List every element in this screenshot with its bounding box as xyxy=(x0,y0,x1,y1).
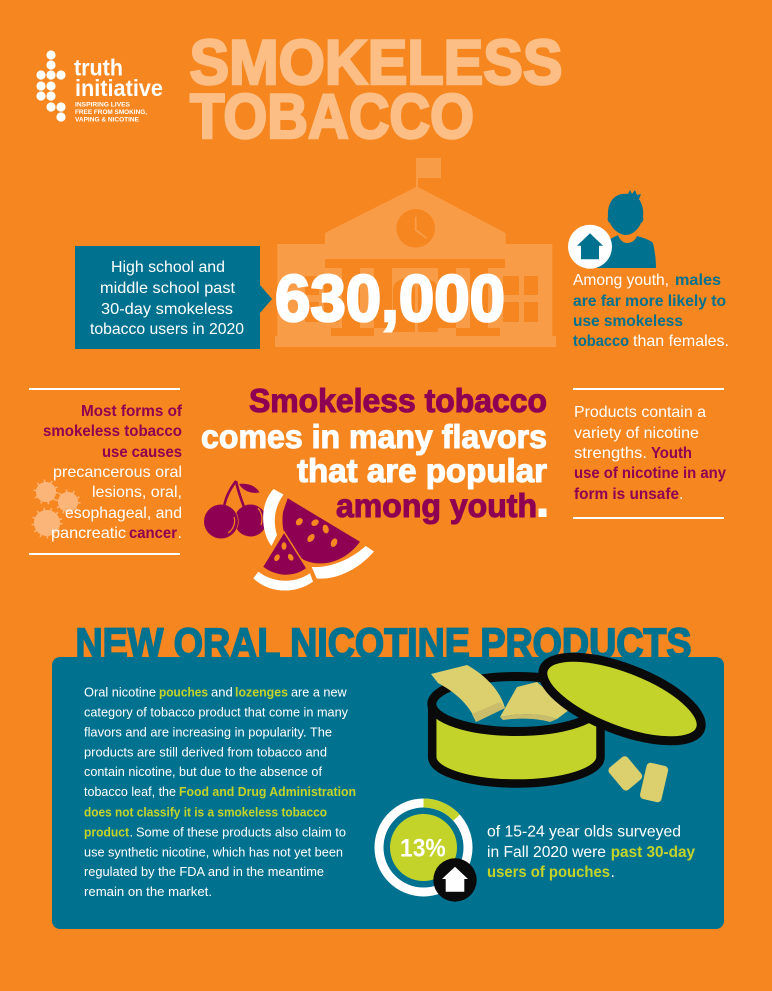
body text: tobacco leaf, the xyxy=(84,784,176,799)
heading: new oral nicotine products: NEW ORAL NICOTINE PRODUCTS xyxy=(76,620,692,668)
icon: cancer cells xyxy=(34,482,78,536)
title xyxy=(190,28,562,152)
icon: boy with up arrow xyxy=(568,190,656,269)
text: 15-24 year olds: in Fall 2020 were xyxy=(487,844,606,861)
heading: flavors: Smokeless tobacco xyxy=(249,382,547,419)
pouches xyxy=(431,665,505,722)
cancer text: . xyxy=(178,525,182,542)
body text: contain nicotine, but due to the absence of xyxy=(84,764,322,779)
text: 15-24 year olds: of 15-24 year olds surveyed xyxy=(487,824,681,841)
body text: category of tobacco product that come in many xyxy=(84,705,348,720)
panel: nicotine strengths xyxy=(573,388,726,519)
text: males more likely xyxy=(573,272,729,350)
large slice rind xyxy=(263,489,284,546)
body text: . xyxy=(130,825,133,840)
text: males more likely: are far more likely to xyxy=(573,293,726,310)
loose pouches xyxy=(607,755,644,792)
heading: flavors: that are popular xyxy=(297,452,547,489)
logo wordmark xyxy=(74,54,163,124)
heading: flavors: among youth xyxy=(336,487,537,524)
title: SMOKELESS xyxy=(190,28,562,98)
panel: nicotine strengths: variety of nicotine xyxy=(574,425,699,442)
cancer text: smokeless tobacco xyxy=(43,423,182,440)
cancer text: esophageal, and xyxy=(65,505,182,522)
body text: products are still derived from tobacco and xyxy=(84,745,327,760)
tin lid xyxy=(532,640,712,758)
body text: lozenges xyxy=(235,685,288,700)
tin opening xyxy=(432,676,601,732)
cancer text: cancer xyxy=(129,525,177,542)
cancer text: Most forms of xyxy=(81,403,183,420)
text: 15-24 year olds: past 30-day xyxy=(611,844,695,861)
text: males more likely: Among youth, xyxy=(573,272,669,289)
body text: product xyxy=(84,825,130,840)
cancer text: pancreatic xyxy=(51,525,126,542)
tin body xyxy=(432,704,600,784)
logo wordmark: initiative xyxy=(75,75,163,101)
body text xyxy=(84,685,356,899)
logo dots xyxy=(36,50,66,122)
panel: nicotine strengths: form is unsafe xyxy=(574,486,679,503)
callout: past 30-day users: middle school past xyxy=(100,280,236,297)
icon: nicotine pouch tin xyxy=(431,640,712,803)
donut chart: 13%: 13% xyxy=(400,835,446,863)
body text: Some of these products also claim to xyxy=(136,825,346,840)
big number: 630,000: 630,000 xyxy=(275,261,505,335)
body text: Food and Drug Administration xyxy=(179,784,356,799)
icon: watermelon slices xyxy=(253,489,374,591)
callout: past 30-day users: 30-day smokeless xyxy=(101,301,233,318)
body text: and xyxy=(211,685,233,700)
body text: flavors and are increasing in popularity. The xyxy=(84,725,332,740)
body text: pouches xyxy=(159,685,208,700)
body text: use synthetic nicotine, which has not yet been xyxy=(84,845,343,860)
body text: remain on the market. xyxy=(84,884,212,899)
text: males more likely: tobacco xyxy=(573,333,629,350)
body text: does not classify it is a smokeless tobacco xyxy=(84,805,327,820)
up arrow badge xyxy=(568,225,612,269)
cancer text xyxy=(43,403,183,542)
panel: new oral nicotine products xyxy=(52,640,724,929)
text: males more likely: use smokeless xyxy=(573,313,683,330)
callout: past 30-day users xyxy=(75,246,272,349)
cancer text: use causes xyxy=(102,444,182,461)
panel: cancer xyxy=(29,388,183,555)
panel: nicotine strengths: use of nicotine in any xyxy=(574,465,726,482)
panel: nicotine strengths: . xyxy=(679,486,683,503)
cancer text: precancerous oral xyxy=(53,464,182,481)
text: 15-24 year olds: users of pouches xyxy=(487,864,610,881)
donut chart: 13% xyxy=(379,803,477,902)
body text: regulated by the FDA and in the meantime xyxy=(84,864,324,879)
icon: cherries xyxy=(204,481,266,538)
heading: flavors: comes in many flavors xyxy=(201,418,547,455)
boy xyxy=(597,190,656,268)
body text: are a new xyxy=(291,685,347,700)
panel: nicotine strengths: strengths. xyxy=(574,445,647,462)
title: TOBACCO xyxy=(190,82,474,152)
icon: school building xyxy=(275,158,556,347)
panel: nicotine strengths: Products contain a xyxy=(574,404,706,421)
small slice rind xyxy=(253,572,313,591)
up arrow badge xyxy=(433,858,477,902)
logo wordmark: INSPIRING LIVES xyxy=(75,102,130,108)
small slice xyxy=(263,533,306,575)
logo: truth initiative xyxy=(36,50,163,124)
text: 15-24 year olds xyxy=(487,824,695,881)
logo wordmark: VAPING & NICOTINE xyxy=(75,116,139,124)
cancer text: lesions, oral, xyxy=(92,484,182,501)
text: 15-24 year olds: . xyxy=(610,864,615,881)
text: males more likely: males xyxy=(675,272,721,289)
text: males more likely: than females. xyxy=(633,333,729,350)
callout: past 30-day users: tobacco users in 2020 xyxy=(90,321,244,338)
heading: flavors xyxy=(201,382,547,524)
callout: past 30-day users: High school and xyxy=(111,259,225,276)
large slice xyxy=(282,498,360,563)
logo wordmark: FREE FROM SMOKING, xyxy=(75,109,147,116)
body text: Oral nicotine xyxy=(84,685,156,700)
panel: nicotine strengths: Youth xyxy=(651,445,692,462)
logo wordmark: truth xyxy=(74,54,123,80)
